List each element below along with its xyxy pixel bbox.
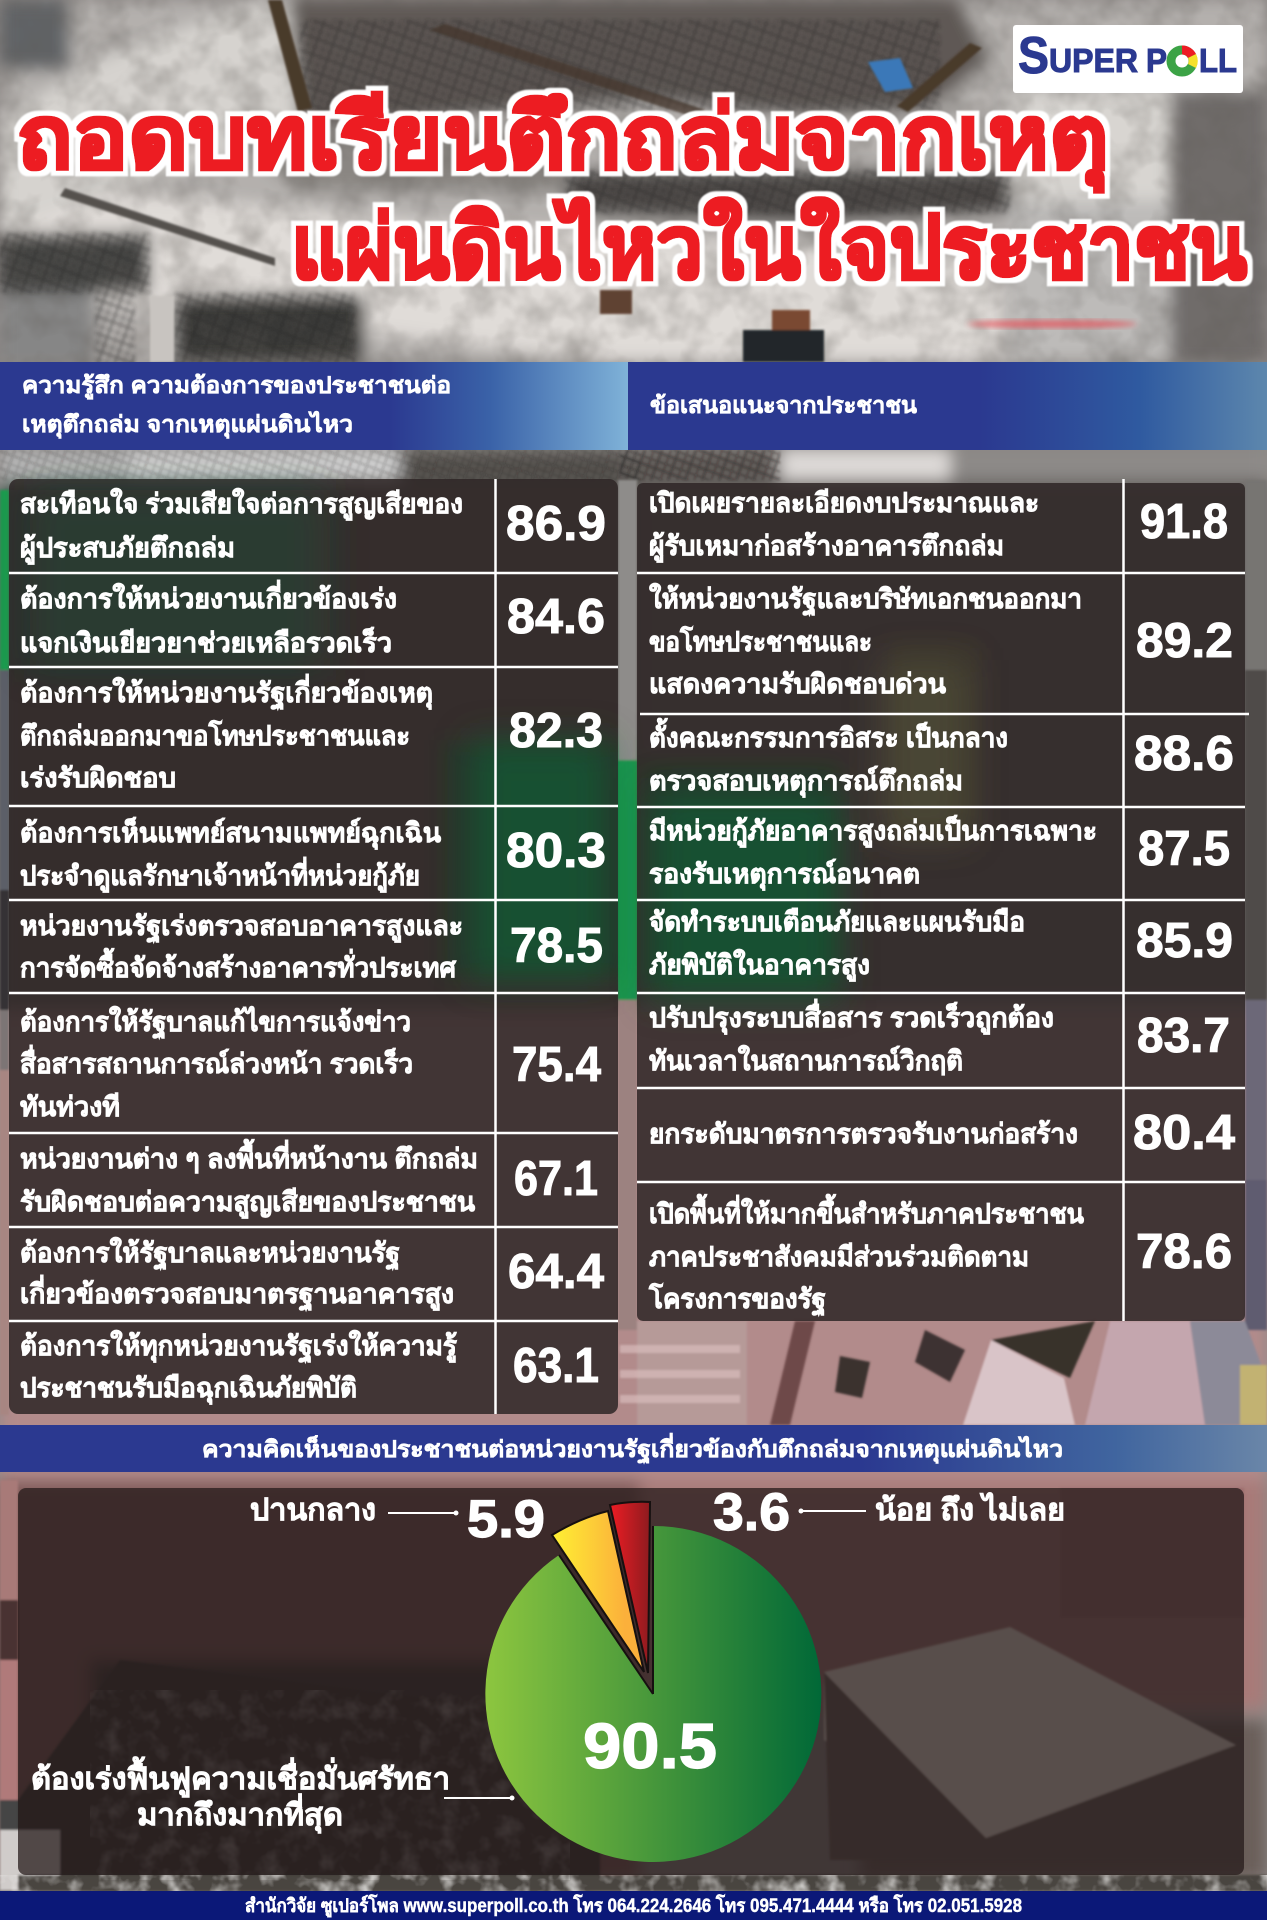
row: 83.7: ปรับปรุงระบบสื่อสาร รวดเร็วถูกต้อง	[649, 998, 1054, 1035]
row: 64.4: เกี่ยวข้องตรวจสอบมาตรฐานอาคารสูง	[20, 1274, 454, 1312]
row: 80.4: 80.4	[1133, 1106, 1235, 1160]
row: 63.1: ประชาชนรับมือฉุกเฉินภัยพิบัติ	[20, 1373, 357, 1405]
row: 82.3: 82.3	[509, 704, 603, 758]
row: 88.6: 88.6	[1134, 727, 1234, 781]
pie panel backdrop	[824, 1627, 1236, 1838]
row: 75.4: สื่อสารสถานการณ์ล่วงหน้า รวดเร็ว	[20, 1044, 413, 1079]
sharp margins	[0, 490, 9, 670]
label: must restore trust: มากถึงมากที่สุด	[137, 1793, 343, 1834]
label: must restore trust	[31, 1756, 514, 1834]
row: 84.6: 84.6	[507, 590, 605, 644]
row: 67.1: หน่วยงานต่าง ๆ ลงพื้นที่หน้างาน ตึกถล่ม	[20, 1138, 478, 1174]
row: 85.9: จัดทำระบบเตือนภัยและแผนรับมือ	[649, 907, 1025, 937]
row: 64.4: ต้องการให้รัฐบาลและหน่วยงานรัฐ	[20, 1237, 400, 1271]
row: 80.3	[20, 815, 606, 893]
row: 89.2: 89.2	[1136, 614, 1233, 668]
row: 85.9: 85.9	[1136, 914, 1233, 968]
row: 63.1: ต้องการให้ทุกหน่วยงานรัฐเร่งให้ความรู้	[20, 1330, 457, 1364]
footer	[0, 1891, 1267, 1920]
row: 87.5: รองรับเหตุการณ์อนาคต	[649, 858, 920, 891]
lens flare	[967, 320, 1137, 328]
panel: right table	[637, 479, 1249, 1321]
row: 86.9: 86.9	[506, 497, 606, 551]
row: 80.3: ต้องการเห็นแพทย์สนามแพทย์ฉุกเฉิน	[20, 815, 442, 850]
row: 75.4: ทันท่วงที	[20, 1092, 120, 1122]
logo: Super Poll: P	[1146, 42, 1167, 79]
heading: left table: ความรู้สึก ความต้องการของประชาชนต่อ	[22, 372, 451, 400]
panel: pie chart	[18, 1483, 1244, 1875]
row: 64.4	[20, 1237, 604, 1312]
row: 82.3: ต้องการให้หน่วยงานรัฐเกี่ยวข้องเหตุ	[20, 673, 433, 711]
row: 63.1: 63.1	[513, 1339, 599, 1393]
row: 91.8: 91.8	[1140, 495, 1228, 549]
title: ถอดบทเรียนตึกถล่มจากเหตุ	[17, 88, 1109, 193]
label: neutral	[250, 1490, 545, 1549]
logo: Super Poll: LL	[1199, 42, 1237, 79]
label: neutral: ปานกลาง	[250, 1494, 376, 1527]
row: 63.1	[20, 1330, 599, 1405]
logo: Super Poll: UPER	[1049, 42, 1138, 79]
row: 78.6: 78.6	[1136, 1225, 1232, 1279]
row: 78.6: โครงการของรัฐ	[648, 1282, 826, 1317]
row: 67.1: รับผิดชอบต่อความสูญเสียของประชาชน	[20, 1187, 476, 1219]
heading: opinion banner	[0, 1425, 1267, 1472]
row: 91.8: ผู้รับเหมาก่อสร้างอาคารตึกถล่ม	[649, 531, 1004, 563]
label: little to none: 3.6	[713, 1483, 790, 1542]
row: 88.6: ตั้งคณะกรรมการอิสระ เป็นกลาง	[649, 717, 1008, 753]
title	[17, 88, 1247, 297]
row: 67.1	[20, 1138, 598, 1219]
row: 88.6	[649, 717, 1234, 798]
row: 80.3: ประจำดูแลรักษาเจ้าหน้าที่หน่วยกู้ภัย	[20, 856, 420, 893]
row: 75.4: 75.4	[512, 1038, 601, 1092]
row: 84.6: ต้องการให้หน่วยงานเกี่ยวข้องเร่ง	[20, 579, 397, 614]
label: neutral: 5.9	[467, 1490, 545, 1549]
row: 82.3: เร่งรับผิดชอบ	[20, 763, 176, 793]
slice: 90.5 green	[485, 1526, 821, 1862]
row: 80.4: ยกระดับมาตรการตรวจรับงานก่อสร้าง	[649, 1119, 1078, 1149]
row: 86.9: ผู้ประสบภัยตึกถล่ม	[20, 533, 235, 565]
row: 91.8	[649, 488, 1228, 563]
row: 85.9	[649, 907, 1233, 982]
row: 87.5	[649, 813, 1230, 891]
row: 84.6	[20, 579, 605, 658]
row: 78.6	[648, 1193, 1232, 1317]
row: 75.4: ต้องการให้รัฐบาลแก้ไขการแจ้งข่าว	[20, 1006, 411, 1040]
row: 64.4: 64.4	[508, 1245, 604, 1299]
label: little to none	[713, 1483, 1065, 1542]
row: 89.2	[649, 583, 1233, 699]
panel: left table	[9, 479, 618, 1414]
heading: left table: เหตุตึกถล่ม จากเหตุแผ่นดินไหว	[22, 410, 353, 439]
row: 89.2: แสดงความรับผิดชอบด่วน	[649, 669, 947, 699]
slice: 5.9 yellow	[552, 1511, 644, 1672]
heading: left table	[0, 362, 628, 450]
row: 78.5	[20, 911, 603, 983]
heading: right table	[628, 362, 1267, 450]
row: 82.3	[20, 673, 603, 793]
row: 80.4	[649, 1106, 1235, 1160]
heading: right table: ข้อเสนอแนะจากประชาชน	[650, 392, 917, 418]
row: 83.7: ทันเวลาในสถานการณ์วิกฤติ	[649, 1045, 963, 1076]
row: 78.6: เปิดพื้นที่ให้มากขึ้นสำหรับภาคประชาชน	[649, 1193, 1085, 1229]
pie chart	[485, 1502, 821, 1862]
row: 88.6: ตรวจสอบเหตุการณ์ตึกถล่ม	[649, 765, 963, 798]
row: 87.5: มีหน่วยกู้ภัยอาคารสูงถล่มเป็นการเฉพาะ	[649, 813, 1097, 848]
row: 82.3: ตึกถล่มออกมาขอโทษประชาชนและ	[20, 719, 410, 751]
row: 78.5: การจัดซื้อจัดจ้างสร้างอาคารทั่วประเทศ	[20, 947, 457, 983]
row: 78.5: หน่วยงานรัฐเร่งตรวจสอบอาคารสูงและ	[20, 911, 463, 944]
row: 75.4	[20, 1006, 601, 1122]
row: 80.3: 80.3	[506, 824, 606, 878]
slice: 3.6 red	[610, 1502, 650, 1673]
label: little to none: น้อย ถึง ไม่เลย	[875, 1492, 1065, 1527]
row: 78.6: ภาคประชาสังคมมีส่วนร่วมติดตาม	[649, 1242, 1029, 1272]
value: 90.5: 90.5	[583, 1710, 717, 1782]
row: 78.5: 78.5	[510, 919, 603, 973]
row: 86.9: สะเทือนใจ ร่วมเสียใจต่อการสูญเสียของ	[20, 488, 463, 521]
icon: poll ring	[1171, 50, 1193, 72]
row: 89.2: ให้หน่วยงานรัฐและบริษัทเอกชนออกมา	[649, 583, 1082, 617]
row: 87.5: 87.5	[1138, 822, 1230, 876]
footer: สำนักวิจัย ซูเปอร์โพล www.superpoll.co.th โทร 064.224.2646 โทร 095.471.4444 หรือ โทร 02.051.5928	[245, 1894, 1022, 1918]
row: 86.9	[20, 488, 606, 565]
row: 83.7: 83.7	[1137, 1009, 1230, 1063]
label: must restore trust: ต้องเร่งฟื้นฟูความเชื่อมั่นศรัทธา	[31, 1756, 450, 1798]
row: 84.6: แจกเงินเยียวยาช่วยเหลือรวดเร็ว	[20, 625, 392, 658]
row: 89.2: ขอโทษประชาชนและ	[649, 625, 872, 657]
row: 83.7	[649, 998, 1230, 1076]
logo: Super Poll: S	[1018, 27, 1049, 85]
row: 91.8: เปิดเผยรายละเอียดงบประมาณและ	[649, 488, 1039, 518]
heading: opinion banner: ความคิดเห็นของประชาชนต่อหน่วยงานรัฐเกี่ยวข้องกับตึกถล่มจากเหตุแผ่นดินไหว	[202, 1432, 1063, 1464]
row: 67.1: 67.1	[514, 1152, 598, 1206]
row: 85.9: ภัยพิบัติในอาคารสูง	[649, 949, 870, 982]
logo: Super Poll	[1013, 25, 1243, 93]
